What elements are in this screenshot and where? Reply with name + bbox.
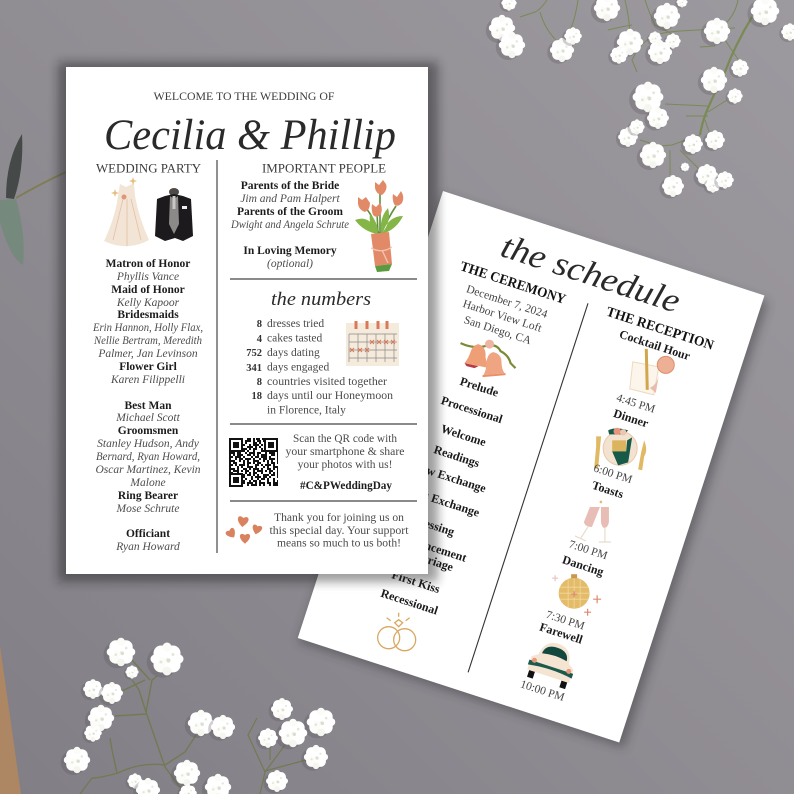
icon: groom suit	[155, 188, 193, 241]
wedding party list: Oscar Martinez, Kevin	[95, 464, 201, 476]
wedding party list: Karen Filippelli	[110, 374, 185, 386]
QR instructions: your smartphone & share	[286, 446, 404, 458]
ceremony order: Ring Exchange	[403, 482, 482, 520]
important people list: Dwight and Angela Schrute	[230, 219, 349, 231]
important people list: Jim and Pam Halpert	[240, 193, 340, 205]
ceremony order: Pronouncement	[387, 526, 468, 565]
divider	[230, 500, 417, 502]
couple names: Cecilia & Phillip	[104, 112, 396, 159]
wedding party list: Ryan Howard	[115, 541, 180, 553]
reception: dinner: Dinner	[612, 406, 651, 431]
ceremony order: Prelude	[458, 374, 501, 400]
ceremony order: Vow Exchange	[412, 459, 488, 496]
reception: dinner: 6:00 PM	[592, 462, 634, 486]
numbers list: 4	[257, 334, 263, 345]
ceremony order: Welcome	[439, 421, 488, 449]
back card shadow	[298, 195, 768, 748]
icon: rings	[378, 613, 416, 651]
ceremony order: Recessional	[379, 586, 440, 618]
reception: farewell: 10:00 PM	[519, 678, 566, 704]
icon: wedding bells	[461, 340, 516, 377]
important people list: Parents of the Bride	[241, 180, 339, 192]
numbers list: countries visited together	[267, 376, 387, 388]
numbers list: cakes tasted	[267, 332, 322, 344]
flowers: top right sprays	[486, 0, 794, 198]
ceremony details: December 7, 2024	[465, 283, 549, 321]
eucalyptus sprig	[0, 134, 66, 265]
reception: toasts: Toasts	[590, 478, 626, 501]
thank you message: this special day. Your support	[270, 525, 409, 537]
icon: wedding dress	[104, 177, 149, 246]
schedule title: the schedule	[496, 228, 685, 320]
reception: toasts	[560, 474, 629, 562]
ceremony details: Harbor View Loft	[461, 298, 544, 335]
panel: welcome card	[66, 67, 428, 574]
wedding party list: Malone	[129, 477, 166, 489]
important people list: (optional)	[267, 258, 313, 270]
reception: dancing: Dancing	[561, 552, 606, 579]
heading: important people: IMPORTANT PEOPLE	[262, 162, 386, 176]
wedding party list: Palmer, Jan Levinson	[97, 348, 198, 360]
wedding party list: Phyllis Vance	[116, 271, 179, 283]
welcome line: WELCOME TO THE WEDDING OF	[154, 91, 334, 103]
wedding party list: Groomsmen	[118, 425, 179, 437]
panel: the schedule card	[298, 191, 764, 742]
important people list: In Loving Memory	[243, 245, 337, 257]
ceremony order: First Kiss	[390, 567, 442, 596]
ceremony details	[455, 283, 549, 350]
flowers: bottom left sprays	[61, 638, 335, 794]
wedding party list	[92, 258, 203, 553]
thank you message: means so much to us both!	[277, 538, 401, 550]
wedding party list: Ring Bearer	[118, 490, 178, 502]
wedding party list: Flower Girl	[119, 361, 177, 373]
reception: cocktail hour: 4:45 PM	[615, 392, 656, 416]
reception heading: THE RECEPTION	[604, 305, 715, 354]
wedding party list: Bridesmaids	[117, 309, 179, 321]
column divider	[468, 303, 588, 672]
numbers list: 8	[257, 319, 262, 330]
reception: dancing	[538, 551, 616, 637]
wedding party list: Best Man	[125, 400, 172, 412]
icon: calendar	[346, 321, 399, 366]
numbers list: days until our Honeymoon	[267, 390, 393, 402]
ceremony order	[369, 368, 520, 621]
QR instructions	[286, 433, 404, 471]
wedding party list: Maid of Honor	[111, 284, 185, 296]
wedding party list: Kelly Kapoor	[116, 297, 180, 309]
thank you message	[270, 512, 409, 550]
wedding party list: Mose Schrute	[116, 503, 179, 515]
divider	[230, 423, 417, 425]
ceremony order: Processional	[439, 393, 505, 426]
wedding party list: Michael Scott	[115, 412, 181, 424]
column divider	[216, 160, 218, 553]
icon: QR code	[229, 439, 278, 486]
ceremony order: Blessing	[412, 512, 456, 539]
wedding party list: Bernard, Ryan Howard,	[96, 451, 200, 463]
QR instructions: Scan the QR code with	[293, 433, 397, 445]
numbers list: 752	[246, 348, 262, 359]
numbers list: 8	[257, 377, 262, 388]
reception: dinner	[580, 402, 662, 489]
divider	[230, 278, 417, 280]
numbers list: 18	[252, 391, 262, 402]
numbers list: days engaged	[267, 362, 330, 374]
numbers list: 341	[246, 363, 262, 374]
reception: farewell: Farewell	[538, 620, 585, 647]
numbers list: days dating	[267, 347, 320, 359]
numbers list: in Florence, Italy	[267, 404, 346, 416]
wedding party list: Erin Hannon, Holly Flax,	[92, 322, 203, 334]
heading: the numbers: the numbers	[271, 289, 371, 310]
heading: wedding party: WEDDING PARTY	[96, 162, 201, 176]
numbers list: dresses tried	[267, 318, 324, 330]
QR instructions: your photos with us!	[298, 459, 392, 471]
reception: toasts: 7:00 PM	[567, 539, 609, 562]
reception: farewell	[519, 619, 586, 704]
kraft paper corner	[0, 646, 21, 794]
numbers list	[246, 318, 393, 416]
wedding party list: Officiant	[126, 528, 170, 540]
front card shadow	[58, 62, 438, 582]
reception: cocktail hour: Cocktail Hour	[618, 327, 693, 363]
important people list	[230, 180, 349, 270]
ceremony order: Readings	[432, 442, 482, 470]
wedding party list: Stanley Hudson, Andy	[97, 438, 200, 450]
wedding party list: Nellie Bertram, Meredith	[93, 335, 202, 347]
important people list: Parents of the Groom	[237, 206, 343, 218]
reception: cocktail hour	[599, 327, 693, 421]
hashtag: #C&PWeddingDay	[300, 480, 392, 492]
thank you message: Thank you for joining us on	[274, 512, 404, 524]
ceremony order: of Marriage	[392, 542, 456, 574]
wedding party list: Matron of Honor	[106, 258, 190, 270]
ceremony heading: THE CEREMONY	[458, 259, 567, 308]
icon: tulip bouquet	[355, 180, 403, 272]
reception: dancing: 7:30 PM	[544, 609, 586, 633]
icon: hearts	[225, 516, 263, 544]
ceremony details: San Diego, CA	[462, 314, 533, 347]
